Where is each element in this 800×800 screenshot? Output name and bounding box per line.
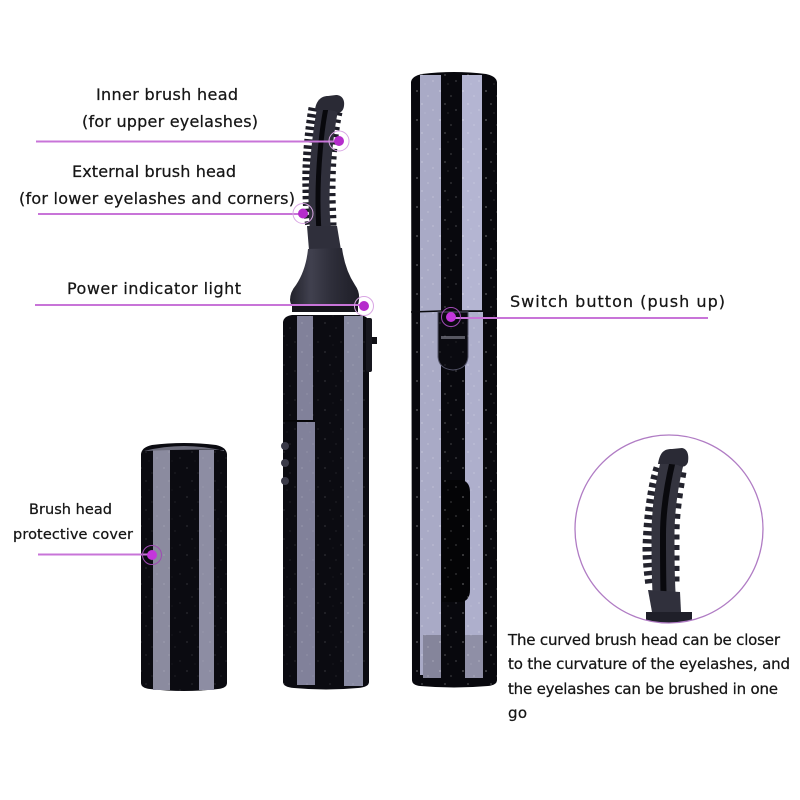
seam bbox=[411, 311, 497, 312]
callout: brush head protective cover bbox=[13, 502, 162, 564]
tip bbox=[315, 95, 344, 113]
protective cover bbox=[141, 443, 227, 691]
spine shadow bbox=[318, 103, 327, 250]
right pen closed bbox=[411, 72, 497, 688]
callout: power indicator light bbox=[35, 279, 374, 316]
spine bbox=[319, 102, 329, 252]
right teeth bbox=[330, 112, 337, 227]
callout: external brush head: External brush head bbox=[72, 162, 236, 181]
callout: power indicator light: Power indicator light bbox=[67, 279, 241, 298]
callout: external brush head: (for lower eyelashes and corners) bbox=[19, 189, 295, 208]
description text bbox=[507, 631, 790, 722]
callout: switch button bbox=[442, 292, 725, 326]
middle pen body bbox=[281, 315, 377, 690]
callout: switch button: Switch button (push up) bbox=[510, 292, 725, 311]
callout: inner brush head: (for upper eyelashes) bbox=[82, 112, 258, 131]
description text: to the curvature of the eyelashes, and bbox=[508, 655, 790, 673]
callout: inner brush head bbox=[36, 85, 349, 151]
callout: brush head protective cover: protective cover bbox=[13, 527, 133, 543]
description text: The curved brush head can be closer bbox=[507, 631, 781, 649]
curler cone collar bbox=[290, 248, 359, 312]
lower speckled band bbox=[423, 635, 441, 678]
side buttons bbox=[281, 442, 289, 450]
stem base bbox=[307, 226, 341, 250]
dark slider groove bbox=[442, 480, 470, 602]
callout: brush head protective cover: Brush head bbox=[29, 502, 112, 518]
callout: inner brush head: Inner brush head bbox=[96, 85, 238, 104]
side clip bbox=[366, 318, 372, 372]
description text: the eyelashes can be brushed in one bbox=[508, 680, 778, 698]
inset circle: brush head close-up bbox=[575, 435, 763, 626]
left teeth bbox=[308, 108, 314, 227]
switch recess bbox=[438, 312, 468, 370]
curler brush head bbox=[307, 95, 344, 252]
description text: go bbox=[508, 704, 527, 722]
callout: external brush head bbox=[19, 162, 313, 224]
